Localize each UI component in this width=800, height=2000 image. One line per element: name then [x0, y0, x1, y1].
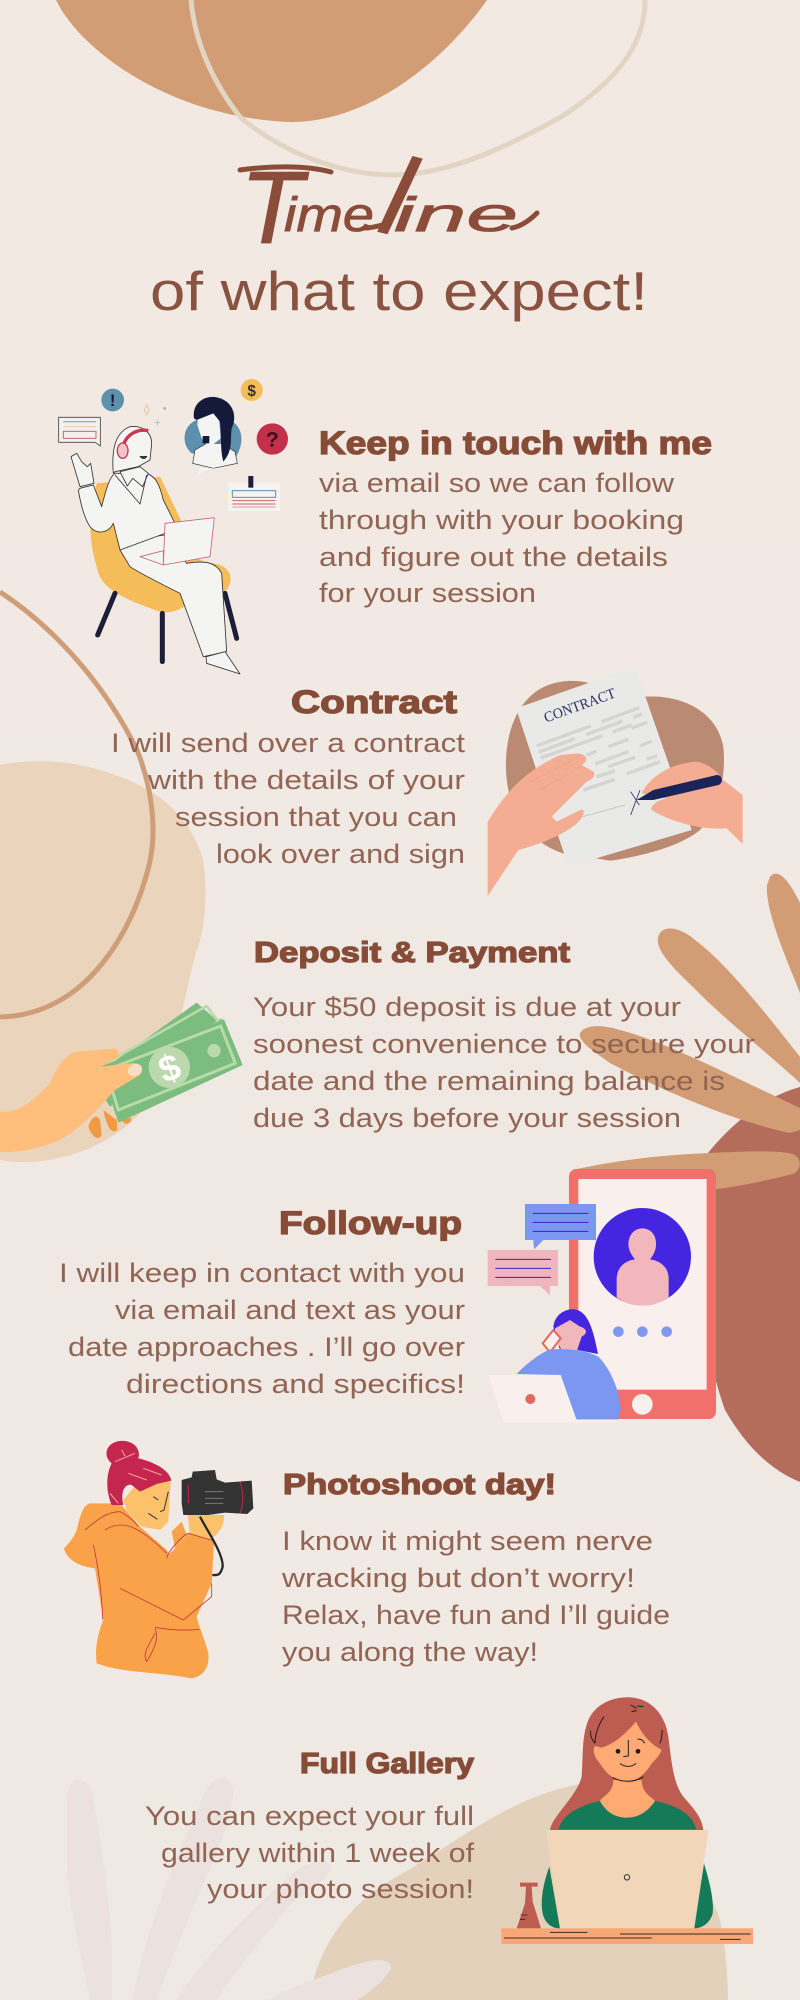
body text: via email and text as your: [115, 1295, 465, 1325]
illustration: woman with headset on chair: [59, 379, 288, 674]
body text: [319, 468, 684, 608]
illustration: hand holding cash: [0, 1003, 243, 1152]
body text: [145, 1801, 475, 1904]
body text: date and the remaining balance is: [253, 1066, 725, 1096]
background shape: top ring: [191, 0, 645, 175]
illustration: second woman portrait: [185, 397, 241, 475]
title script word: ime: [284, 189, 374, 242]
heading: Full Gallery: [300, 1748, 474, 1780]
body text: look over and sign: [216, 839, 465, 869]
background shape: left blob: [0, 761, 205, 1162]
body text: [253, 992, 755, 1133]
illustration: hand holding cash: $: [153, 1045, 186, 1091]
illustration: signing a contract: CONTRACT: [542, 686, 618, 726]
icon: question badge: ?: [266, 428, 279, 452]
heading: Contract: [291, 684, 457, 720]
panel: contract: [111, 667, 743, 896]
panel: deposit and payment: [0, 937, 755, 1152]
background shape: right blob: [701, 1087, 800, 1482]
title: [150, 133, 648, 322]
body text: I will send over a contract: [111, 728, 466, 758]
body text: soonest convenience to secure your: [253, 1029, 755, 1059]
body text: Your $50 deposit is due at your: [253, 992, 681, 1022]
heading: Keep in touch with me: [319, 425, 712, 461]
title script word: T: [240, 150, 309, 265]
subtitle: of what to expect!: [150, 260, 648, 322]
illustration: woman at laptop: [501, 1697, 753, 1944]
heading: Photoshoot day!: [283, 1469, 556, 1501]
body text: via email so we can follow: [319, 468, 675, 498]
body text: [59, 1258, 465, 1399]
title script word: ine: [394, 189, 518, 242]
icon: vase: [517, 1883, 541, 1928]
background shape: bottom beige blob: [310, 1783, 728, 2000]
body text: through with your booking: [319, 505, 684, 535]
illustration: phone and woman calling: [488, 1169, 716, 1423]
body text: wracking but don’t worry!: [281, 1563, 635, 1593]
icon: question badge: [257, 423, 288, 455]
body text: session that you can: [175, 802, 457, 832]
illustration: signing a contract: [488, 667, 743, 896]
body text: and figure out the details: [319, 542, 668, 572]
heading: Deposit & Payment: [254, 937, 570, 969]
panel: follow-up: [59, 1169, 716, 1423]
body text: I will keep in contact with you: [59, 1258, 465, 1288]
panel: full gallery: [145, 1697, 753, 1944]
body text: your photo session!: [207, 1874, 474, 1904]
title script word: l: [370, 133, 428, 261]
body text: directions and specifics!: [126, 1369, 465, 1399]
body text: due 3 days before your session: [253, 1103, 681, 1133]
icon: exclamation badge: [101, 389, 124, 411]
icon: message box: [59, 417, 100, 446]
background shape: right leaves: [577, 874, 800, 1189]
body text: [111, 728, 466, 869]
body text: Relax, have fun and I’ll guide: [282, 1600, 670, 1630]
panel: keep in touch: [59, 379, 712, 674]
body text: for your session: [319, 578, 536, 608]
body text: you along the way!: [282, 1637, 538, 1667]
icon: note card: [228, 476, 280, 511]
illustration: photographer with camera: [64, 1441, 253, 1678]
icon: exclamation badge: !: [110, 391, 115, 410]
heading: Follow-up: [279, 1205, 462, 1241]
body text: with the details of your: [147, 765, 465, 795]
title flourishes: [240, 167, 537, 228]
background shape: left ring: [0, 592, 153, 1017]
desk: [501, 1928, 753, 1944]
panel: photoshoot day: [64, 1441, 670, 1678]
body text: gallery within 1 week of: [161, 1838, 475, 1868]
body text: I know it might seem nerve: [282, 1526, 653, 1556]
background shape: pale leaves: [67, 1778, 391, 2000]
background shape: top blob: [56, 0, 487, 122]
body text: You can expect your full: [145, 1801, 474, 1831]
icon: dollar coin: [241, 379, 263, 401]
body text: date approaches . I’ll go over: [68, 1332, 465, 1362]
icon: dollar coin: $: [247, 383, 256, 400]
body text: [281, 1526, 670, 1667]
